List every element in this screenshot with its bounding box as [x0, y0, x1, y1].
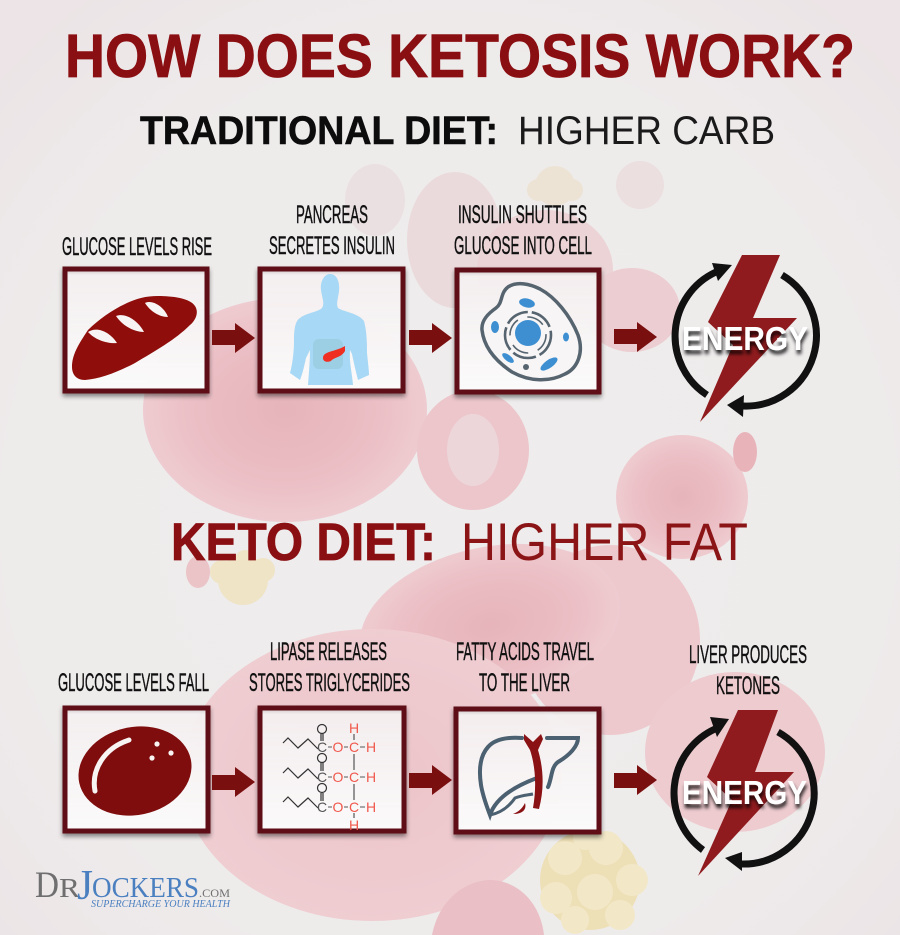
- icon: triglyceride molecule: C: [349, 769, 359, 785]
- icon: triglyceride molecule: H: [366, 769, 376, 785]
- icon: energy cycle: ENERGY: [682, 774, 807, 811]
- step 1: glucose levels rise: GLUCOSE LEVELS RISE: [62, 233, 212, 261]
- logo: DrJockers.com: OCKERS: [92, 873, 199, 904]
- step 4: liver produces ketones: [674, 641, 814, 876]
- step 2: lipase releases triglycerides: LIPASE RELEASES: [270, 638, 387, 666]
- arrow: [212, 323, 255, 353]
- step 4: liver produces ketones: KETONES: [716, 672, 780, 700]
- step 3: insulin shuttles glucose: GLUCOSE INTO CELL: [454, 232, 592, 260]
- step 1: glucose levels fall: GLUCOSE LEVELS FALL: [58, 669, 209, 697]
- arrow: [409, 323, 452, 353]
- panel: keto diet flow: [58, 638, 814, 876]
- icon: triglyceride molecule: O: [333, 769, 344, 785]
- icon: triglyceride molecule: H: [349, 817, 359, 833]
- icon: triglyceride molecule: C: [349, 799, 359, 815]
- step 3: fatty acids travel to liver: FATTY ACIDS TRAVEL: [456, 638, 594, 666]
- logo: DrJockers.com: R: [59, 873, 80, 903]
- heading: keto diet: HIGHER FAT: [461, 513, 748, 572]
- icon: triglyceride molecule: O: [333, 739, 344, 755]
- icon: cell: [482, 284, 580, 380]
- icon: triglyceride molecule: O: [333, 799, 344, 815]
- icon: triglyceride molecule: [283, 720, 376, 833]
- arrow: [212, 767, 255, 797]
- step 2: lipase releases triglycerides: [249, 638, 410, 833]
- step 3: insulin shuttles glucose: [454, 201, 599, 392]
- panel: traditional diet flow: [62, 201, 816, 422]
- logo: DrJockers.com: D: [35, 865, 59, 906]
- icon: energy cycle: [674, 710, 814, 876]
- icon: triglyceride molecule: C: [317, 739, 327, 755]
- step 3: fatty acids travel to liver: [456, 638, 599, 832]
- heading: traditional diet: TRADITIONAL DIET:: [140, 109, 498, 153]
- icon: liver: [480, 734, 578, 815]
- step 2: lipase releases triglycerides: STORES TRIGLYCERIDES: [249, 669, 410, 697]
- logo: DrJockers.com: J: [77, 863, 93, 909]
- icon: bread: [72, 296, 197, 380]
- icon: triglyceride molecule: C: [349, 739, 359, 755]
- arrow: [614, 322, 657, 352]
- step 1: glucose levels rise: [62, 233, 212, 391]
- step 1: glucose levels fall: [58, 669, 209, 831]
- step 2: pancreas secretes insulin: PANCREAS: [296, 201, 368, 229]
- logo: DrJockers.com: [35, 863, 231, 910]
- heading: keto diet: [171, 513, 748, 572]
- step 2: pancreas secretes insulin: [260, 201, 403, 391]
- step 3: insulin shuttles glucose: INSULIN SHUTTLES: [458, 201, 587, 229]
- logo: DrJockers.com: .COM: [199, 886, 230, 900]
- heading: keto diet: KETO DIET:: [171, 513, 436, 572]
- icon: triglyceride molecule: H: [366, 739, 376, 755]
- icon: triglyceride molecule: C: [317, 799, 327, 815]
- icon: energy cycle: [675, 255, 816, 422]
- icon: triglyceride molecule: C: [317, 769, 327, 785]
- arrow: [614, 765, 657, 795]
- icon: torso with pancreas: [290, 274, 369, 385]
- step 2: pancreas secretes insulin: SECRETES INSULIN: [269, 232, 395, 260]
- logo: DrJockers.com: SUPERCHARGE YOUR HEALTH: [91, 899, 231, 910]
- heading: traditional diet: [140, 109, 775, 153]
- step 3: fatty acids travel to liver: TO THE LIVER: [479, 669, 570, 697]
- heading: traditional diet: HIGHER CARB: [518, 109, 775, 153]
- arrow: [409, 765, 452, 795]
- icon: triglyceride molecule: H: [366, 799, 376, 815]
- icon: energy cycle: ENERGY: [682, 320, 808, 357]
- icon: triglyceride molecule: H: [349, 720, 359, 736]
- icon: red blood cell: [70, 716, 200, 826]
